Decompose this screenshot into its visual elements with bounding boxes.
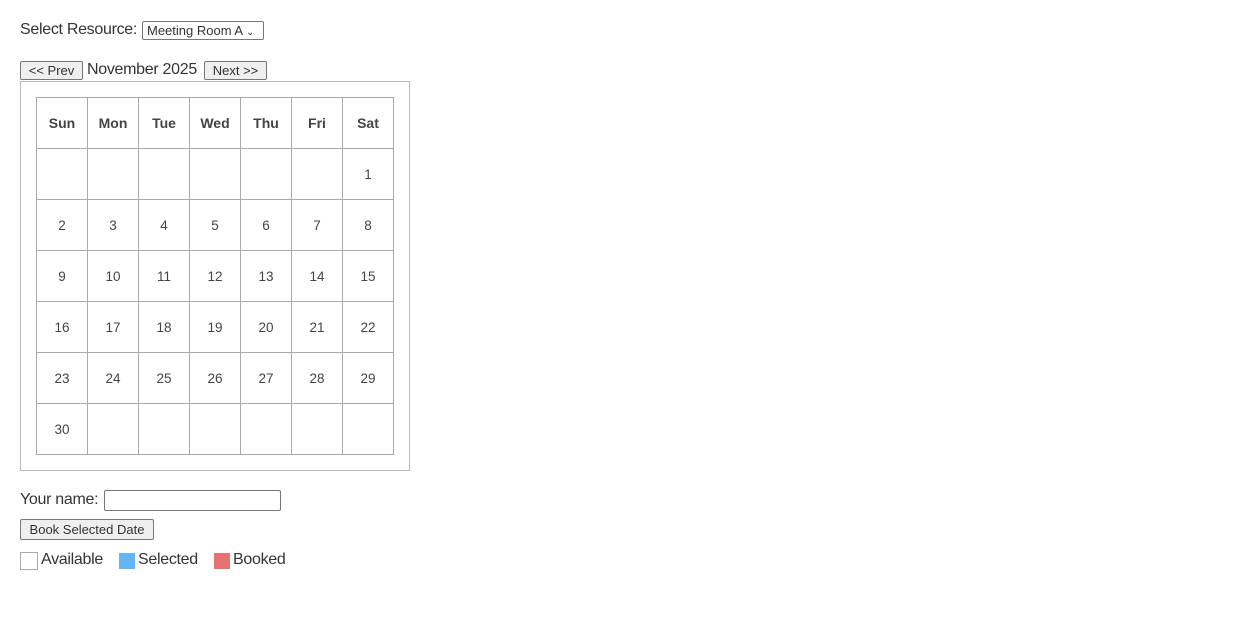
calendar table: 26: [207, 370, 223, 386]
calendar table: 24: [105, 370, 121, 386]
calendar table: 7: [313, 218, 321, 232]
book button: Book Selected Date: [30, 522, 144, 537]
calendar table: 23: [54, 370, 70, 386]
resource select: [142, 21, 264, 40]
calendar table: 19: [207, 320, 223, 334]
name label: Your name:: [20, 491, 98, 508]
calendar table: 27: [258, 370, 274, 386]
calendar table: 30: [54, 422, 70, 436]
legend: available: [20, 552, 38, 570]
calendar table: 25: [156, 370, 172, 386]
prev button: << Prev: [29, 63, 74, 78]
calendar table: 21: [309, 320, 325, 334]
calendar table: 22: [360, 320, 376, 334]
calendar table: 3: [109, 218, 117, 232]
calendar table: 1: [364, 166, 372, 182]
legend: selected: [119, 553, 135, 569]
calendar table: Wed: [200, 115, 230, 131]
calendar panel: [20, 81, 410, 471]
calendar table: 9: [58, 268, 66, 284]
calendar table: 29: [360, 370, 376, 386]
calendar table: 10: [105, 268, 121, 284]
calendar table: 13: [258, 268, 274, 284]
resource label: Select Resource:: [20, 21, 137, 38]
next button: Next >>: [213, 63, 258, 78]
legend: [20, 551, 285, 570]
calendar table: 5: [211, 218, 219, 232]
legend: Selected: [138, 551, 198, 568]
prev button: [20, 61, 83, 80]
calendar table: 8: [364, 218, 372, 232]
calendar table: 17: [105, 320, 121, 334]
calendar table: 12: [207, 268, 223, 284]
legend: Booked: [233, 551, 285, 568]
calendar table: 18: [156, 320, 172, 334]
calendar table: 11: [157, 268, 171, 284]
calendar table: 6: [262, 218, 270, 232]
legend: booked: [214, 553, 230, 569]
calendar table: 28: [309, 370, 325, 386]
name input: [104, 490, 281, 511]
calendar table: Thu: [253, 115, 279, 131]
calendar table: 20: [258, 320, 274, 334]
calendar table: Sun: [49, 115, 75, 131]
calendar table: Sat: [357, 115, 379, 131]
calendar table: 2: [58, 218, 66, 232]
calendar table: 15: [360, 268, 376, 284]
calendar table: [36, 97, 394, 455]
calendar table: 16: [54, 320, 70, 334]
legend: Available: [41, 551, 103, 568]
next button: [204, 61, 267, 80]
calendar table: Tue: [152, 115, 176, 131]
month title: November 2025: [87, 61, 197, 78]
resource select: Meeting Room A ⌄: [147, 23, 254, 38]
calendar table: 4: [160, 218, 168, 232]
calendar table: Fri: [308, 115, 326, 131]
calendar table: Mon: [99, 115, 127, 131]
book button: [20, 519, 154, 540]
calendar table: 14: [309, 268, 325, 284]
